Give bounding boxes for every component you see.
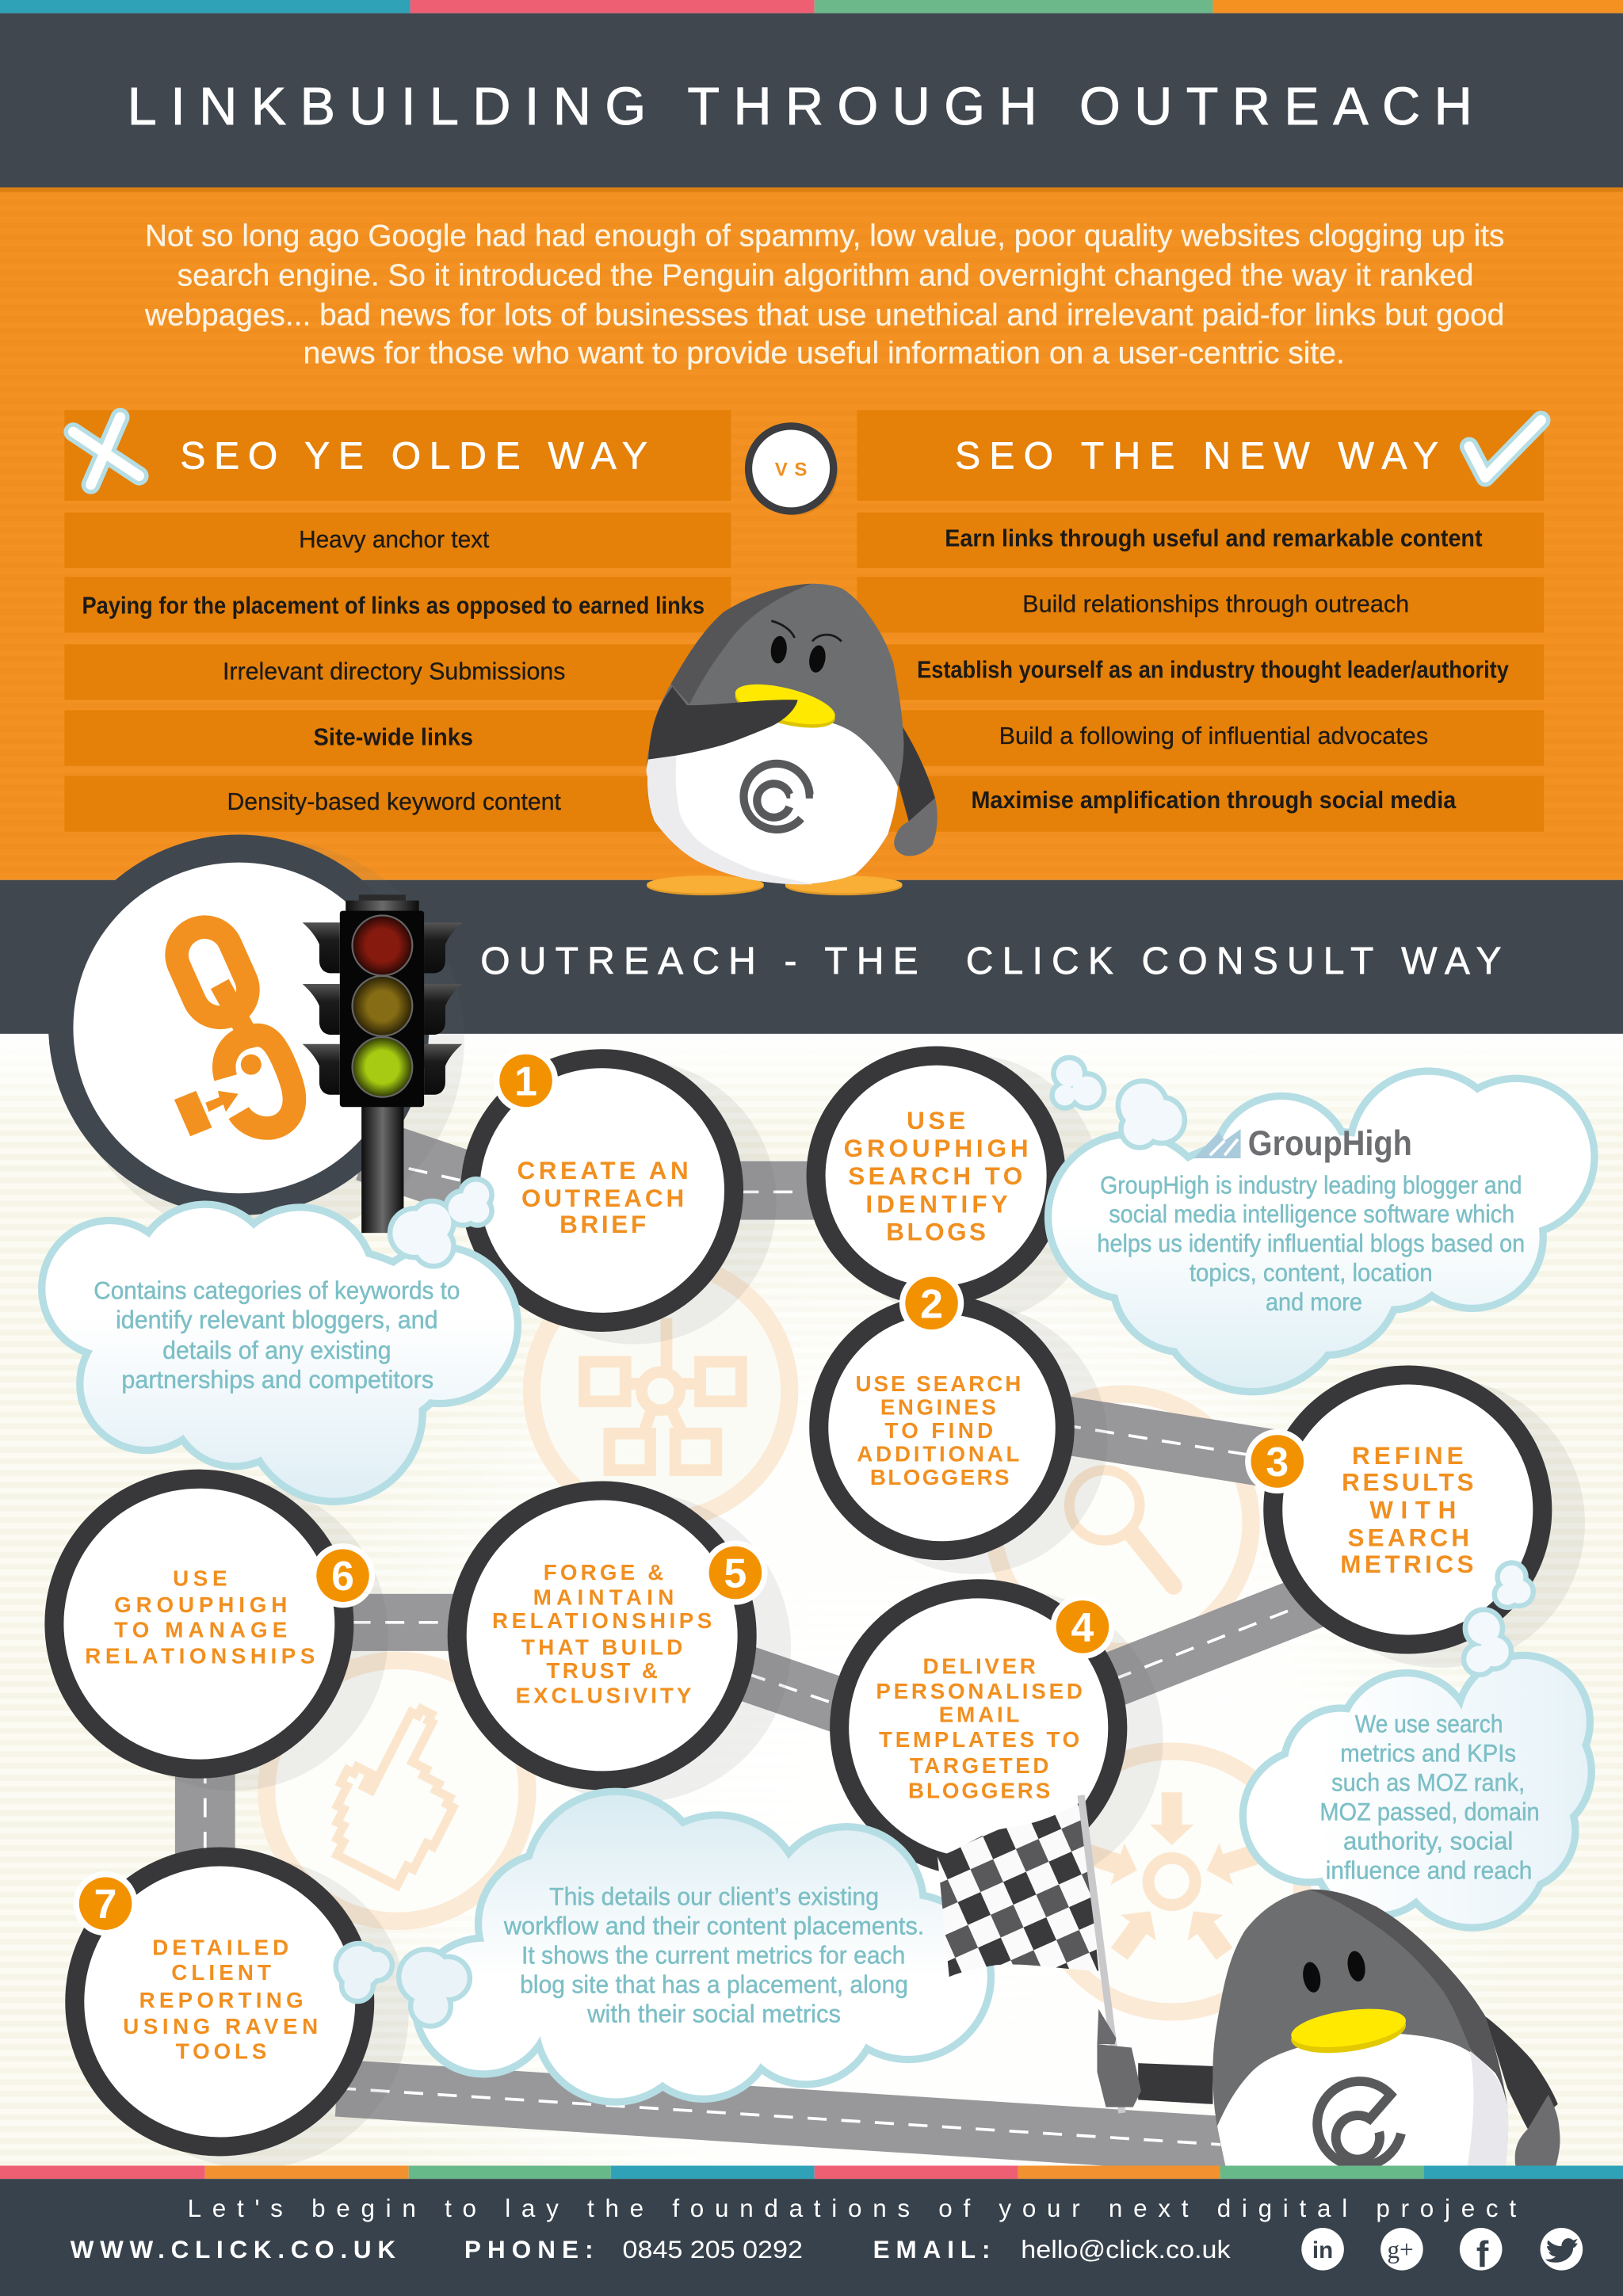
step 1 circle [470, 1058, 777, 1344]
footer phone [464, 2236, 803, 2264]
step 2a circle [816, 1055, 1102, 1324]
step 4 circle: TARGETED [910, 1753, 1048, 1778]
panel: SEO ye olde way: Irrelevant directory Submissions [223, 658, 565, 685]
badge 3 [1245, 1429, 1309, 1493]
footer colour stripe [0, 2166, 1623, 2179]
click logo [1317, 2081, 1401, 2166]
panel: SEO the new way: Earn links through useful and remarkable content [945, 524, 1483, 551]
cloud: keyword brief: Contains categories of keywords to [94, 1276, 460, 1304]
intro text [144, 219, 1504, 370]
feet [647, 875, 903, 895]
footer phone: 0845 205 0292 [623, 2236, 803, 2264]
step 3 circle [1273, 1375, 1585, 1668]
step 2b circle: ADDITIONAL [857, 1442, 1020, 1466]
vs badge: VS [775, 460, 807, 481]
footer email [873, 2236, 1231, 2264]
badge 6: 6 [331, 1553, 354, 1599]
badge 2: 2 [920, 1280, 943, 1326]
icon: google plus [1381, 2228, 1423, 2271]
panel: SEO ye olde way: Site-wide links [314, 724, 473, 751]
panel: SEO the new way: Establish yourself as an industry thought leader/authority [917, 657, 1509, 684]
flipper [894, 727, 938, 856]
cloud: client reporting: blog site that has a placement, along [520, 1970, 908, 1998]
cloud: search metrics: influence and reach [1326, 1856, 1532, 1884]
badge 1: 1 [514, 1058, 537, 1104]
heading: outreach: OUTREACH - THE CLICK CONSULT WAY [480, 940, 1502, 982]
wing [648, 687, 798, 759]
step 3 circle: RESULTS [1342, 1468, 1473, 1496]
icon: facebook: f [1476, 2233, 1489, 2275]
icon: twitter [1541, 2228, 1583, 2271]
panel: SEO ye olde way: Heavy anchor text [299, 526, 490, 553]
cloud: GroupHigh: social media intelligence software which [1109, 1200, 1514, 1228]
step 4 circle: BLOGGERS [908, 1779, 1050, 1803]
footer website: WWW.CLICK.CO.UK [71, 2236, 395, 2264]
cloud: GroupHigh: helps us identify influential blogs based on [1097, 1230, 1525, 1257]
traffic light [303, 894, 462, 1233]
badge 7 [73, 1871, 138, 1936]
step 6 circle: TO MANAGE [114, 1617, 287, 1642]
step 1 circle: BRIEF [559, 1211, 646, 1238]
step 2a circle: GROUPHIGH [844, 1135, 1029, 1162]
step 4 circle: DELIVER [922, 1654, 1036, 1679]
outreach band [0, 880, 1623, 1034]
cloud: client reporting [338, 1795, 987, 2098]
step 7 circle: REPORTING [139, 1988, 304, 2012]
cloud: search metrics: metrics and KPIs [1340, 1739, 1516, 1767]
watermark: magnifier icon [993, 1394, 1251, 1652]
badge 6 [311, 1543, 375, 1608]
cloud: client reporting: This details our client’s existing [549, 1883, 879, 1911]
cloud: GroupHigh [1052, 1060, 1591, 1388]
intro text: Not so long ago Google had had enough of spammy, low value, poor quality websites clogging up its [145, 219, 1504, 253]
panel: SEO the new way: Maximise amplification through social media [971, 787, 1457, 814]
watermark: network icon [532, 1262, 789, 1520]
footer email: hello@click.co.uk [1021, 2236, 1231, 2264]
vs badge [749, 426, 838, 516]
icon: cross [73, 418, 139, 485]
step 6 circle: GROUPHIGH [114, 1592, 287, 1617]
cloud: keyword brief: partnerships and competitors [121, 1366, 433, 1394]
step 5 circle: EXCLUSIVITY [516, 1683, 692, 1707]
icon: facebook [1460, 2228, 1503, 2275]
step 5 circle: THAT BUILD [521, 1634, 682, 1659]
step 4 circle: PERSONALISED [876, 1679, 1083, 1703]
panel: SEO ye olde way: Density-based keyword content [227, 788, 561, 815]
watermark: hand cursor icon [266, 1661, 527, 1921]
step 7 circle: CLIENT [171, 1960, 271, 1985]
step 6 circle: USE [173, 1566, 227, 1591]
top colour stripe [0, 0, 1623, 13]
badge 7: 7 [94, 1881, 116, 1927]
step 2a circle: USE [907, 1107, 965, 1135]
badge 3: 3 [1266, 1439, 1289, 1485]
step 3 circle: SEARCH [1348, 1524, 1469, 1552]
badge 5: 5 [724, 1550, 747, 1596]
cloud: client reporting: It shows the current metrics for each [521, 1941, 905, 1969]
footer tagline: Let's begin to lay the foundations of your next digital project [188, 2195, 1516, 2222]
body [647, 584, 903, 884]
footer email: EMAIL: [873, 2236, 991, 2264]
cloud: client reporting: with their social metrics [586, 2000, 841, 2027]
intro text: news for those who want to provide useful information on a user-centric site. [304, 336, 1345, 370]
step 3 circle: WITH [1369, 1497, 1456, 1524]
step 1 circle: OUTREACH [521, 1184, 684, 1212]
hand [1097, 2009, 1141, 2107]
step 2b circle: ENGINES [880, 1394, 996, 1419]
intro text: webpages... bad news for lots of businesses that use unethical and irrelevant paid-for links but good [144, 298, 1504, 332]
panel: SEO the new way: SEO THE NEW WAY [955, 435, 1438, 477]
panel: SEO the new way [857, 410, 1544, 832]
step 7 circle [74, 1857, 409, 2168]
step 4 circle: EMAIL [939, 1703, 1020, 1726]
belly [647, 721, 898, 884]
step 5 circle: RELATIONSHIPS [492, 1608, 712, 1633]
panel: SEO the new way: Build a following of influential advocates [999, 723, 1428, 749]
step 7 circle: USING RAVEN [123, 2014, 318, 2039]
cloud: search metrics: authority, social [1343, 1827, 1513, 1855]
cloud: search metrics: MOZ passed, domain [1319, 1798, 1540, 1825]
arm [1138, 2063, 1212, 2104]
step 1 circle: CREATE AN [517, 1157, 689, 1184]
panel: SEO ye olde way: Paying for the placement of links as opposed to earned links [82, 592, 705, 619]
badge 4 [1050, 1595, 1115, 1659]
step 6 circle: RELATIONSHIPS [85, 1644, 315, 1669]
badge 1 [494, 1048, 558, 1113]
cloud: client reporting: workflow and their content placements. [503, 1912, 924, 1939]
eyes [1300, 1950, 1368, 1994]
step 7 circle: TOOLS [176, 2039, 266, 2064]
cloud: search metrics: such as MOZ rank, [1331, 1768, 1525, 1796]
cloud: keyword brief [45, 1182, 514, 1498]
step 3 circle: METRICS [1340, 1550, 1473, 1578]
step 4 circle [839, 1589, 1163, 1889]
background: striped lower section [0, 1034, 1623, 2168]
cloud: search metrics [1247, 1566, 1588, 1924]
badge 2 [899, 1271, 964, 1336]
icon: GroupHigh logo: GroupHigh [1248, 1124, 1412, 1163]
penguin: top [647, 584, 938, 895]
icon: google plus: g+ [1387, 2236, 1414, 2264]
cloud: search metrics: We use search [1355, 1710, 1503, 1737]
belly [1217, 2034, 1508, 2173]
big link circle [48, 834, 464, 1240]
icon: check mark [1469, 420, 1541, 478]
step 3 circle: REFINE [1352, 1442, 1464, 1470]
panel: SEO the new way: Build relationships through outreach [1022, 591, 1409, 618]
step 5 circle: FORGE & [544, 1560, 663, 1585]
head shade [1310, 1890, 1507, 2104]
step 2a circle: IDENTIFY [865, 1190, 1008, 1218]
click logo [744, 764, 813, 830]
step 2b circle: BLOGGERS [870, 1465, 1010, 1489]
beak [1289, 2003, 1408, 2059]
panel: SEO ye olde way [64, 410, 731, 832]
step 2b circle: USE SEARCH [855, 1371, 1021, 1396]
cloud: GroupHigh: and more [1266, 1288, 1362, 1316]
chequered flag [938, 1795, 1122, 2113]
step 2b circle [819, 1305, 1107, 1574]
cloud: keyword brief: details of any existing [162, 1337, 391, 1364]
eyes [769, 635, 827, 674]
footer band [0, 2179, 1623, 2296]
badge 4: 4 [1071, 1604, 1094, 1650]
step 6 circle [54, 1479, 388, 1791]
step 2a circle: BLOGS [886, 1218, 986, 1245]
header band [0, 13, 1623, 188]
step 4 circle: TEMPLATES TO [879, 1727, 1079, 1752]
step 5 circle: MAINTAIN [533, 1585, 674, 1610]
body [1212, 1890, 1508, 2173]
panel: orange comparison section [0, 188, 1623, 880]
cloud: keyword brief: identify relevant bloggers, and [116, 1306, 438, 1333]
step 2b circle: TO FIND [884, 1418, 993, 1443]
penguin: bottom [1097, 1890, 1560, 2173]
step 2a circle: SEARCH TO [848, 1162, 1022, 1190]
eyebrows [771, 621, 842, 642]
road network [205, 1150, 1319, 2145]
icon: linkedin: in [1312, 2237, 1333, 2264]
step 7 circle: DETAILED [152, 1935, 288, 1959]
icon: GroupHigh logo [1193, 1124, 1412, 1163]
step 5 circle: TRUST & [546, 1658, 658, 1683]
icon: linkedin [1301, 2228, 1344, 2271]
beak [731, 677, 839, 736]
intro text: search engine. So it introduced the Penguin algorithm and overnight changed the way it ranked [178, 258, 1473, 292]
cloud: GroupHigh: topics, content, location [1190, 1259, 1433, 1287]
right flipper [1485, 2016, 1560, 2173]
step 5 circle [457, 1490, 791, 1802]
title: LINKBUILDING THROUGH OUTREACH [128, 78, 1472, 136]
icon: chain link [168, 918, 294, 1136]
head shade [671, 584, 811, 704]
watermark: converging arrows icon [1041, 1751, 1302, 2012]
badge 5 [703, 1540, 768, 1605]
panel: SEO ye olde way: SEO YE OLDE WAY [180, 435, 647, 477]
cloud: GroupHigh: GroupHigh is industry leading blogger and [1100, 1171, 1522, 1199]
footer phone: PHONE: [464, 2236, 594, 2264]
